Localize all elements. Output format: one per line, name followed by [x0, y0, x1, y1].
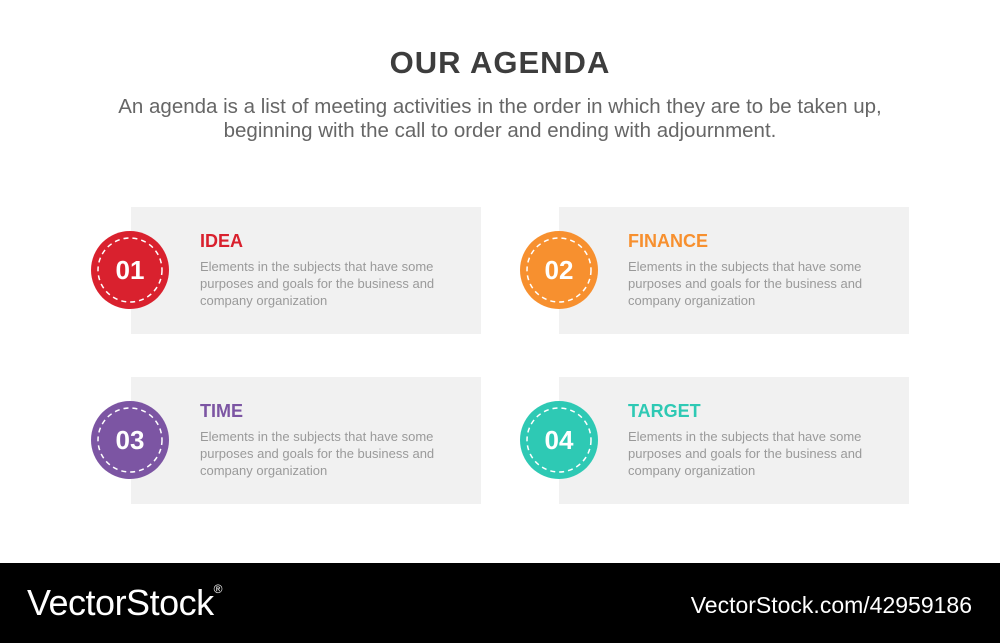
footer id: VectorStock.com/42959186	[691, 592, 972, 618]
footer bar	[0, 563, 1000, 643]
text time: Elements in the subjects that have some purposes and goals for the business and company organization	[200, 429, 434, 478]
icon: circle 01: 01	[116, 255, 144, 285]
icon: circle 01	[91, 231, 169, 309]
footer logo: VectorStock®	[27, 582, 222, 623]
heading idea: IDEA	[200, 231, 243, 251]
subtitle: An agenda is a list of meeting activities in the order in which they are to be taken up,	[118, 95, 882, 118]
panel: idea	[131, 207, 481, 334]
subtitle: beginning with the call to order and ending with adjournment.	[224, 119, 776, 142]
icon: circle 03: 03	[116, 425, 144, 455]
panel: finance	[559, 207, 909, 334]
text target: Elements in the subjects that have some purposes and goals for the business and company organization	[628, 429, 862, 478]
heading time: TIME	[200, 401, 243, 421]
icon: circle 04	[520, 401, 598, 479]
heading target: TARGET	[628, 401, 701, 421]
icon: circle 03	[91, 401, 169, 479]
icon: circle 02: 02	[545, 255, 573, 285]
text idea: Elements in the subjects that have some purposes and goals for the business and company organization	[200, 259, 434, 308]
icon: circle 04: 04	[545, 425, 574, 455]
heading finance: FINANCE	[628, 231, 708, 251]
subtitle	[118, 95, 882, 142]
icon: circle 02	[520, 231, 598, 309]
panel: time	[131, 377, 481, 504]
text finance: Elements in the subjects that have some purposes and goals for the business and company organization	[628, 259, 862, 308]
title: OUR AGENDA	[390, 45, 610, 80]
panel: target	[559, 377, 909, 504]
